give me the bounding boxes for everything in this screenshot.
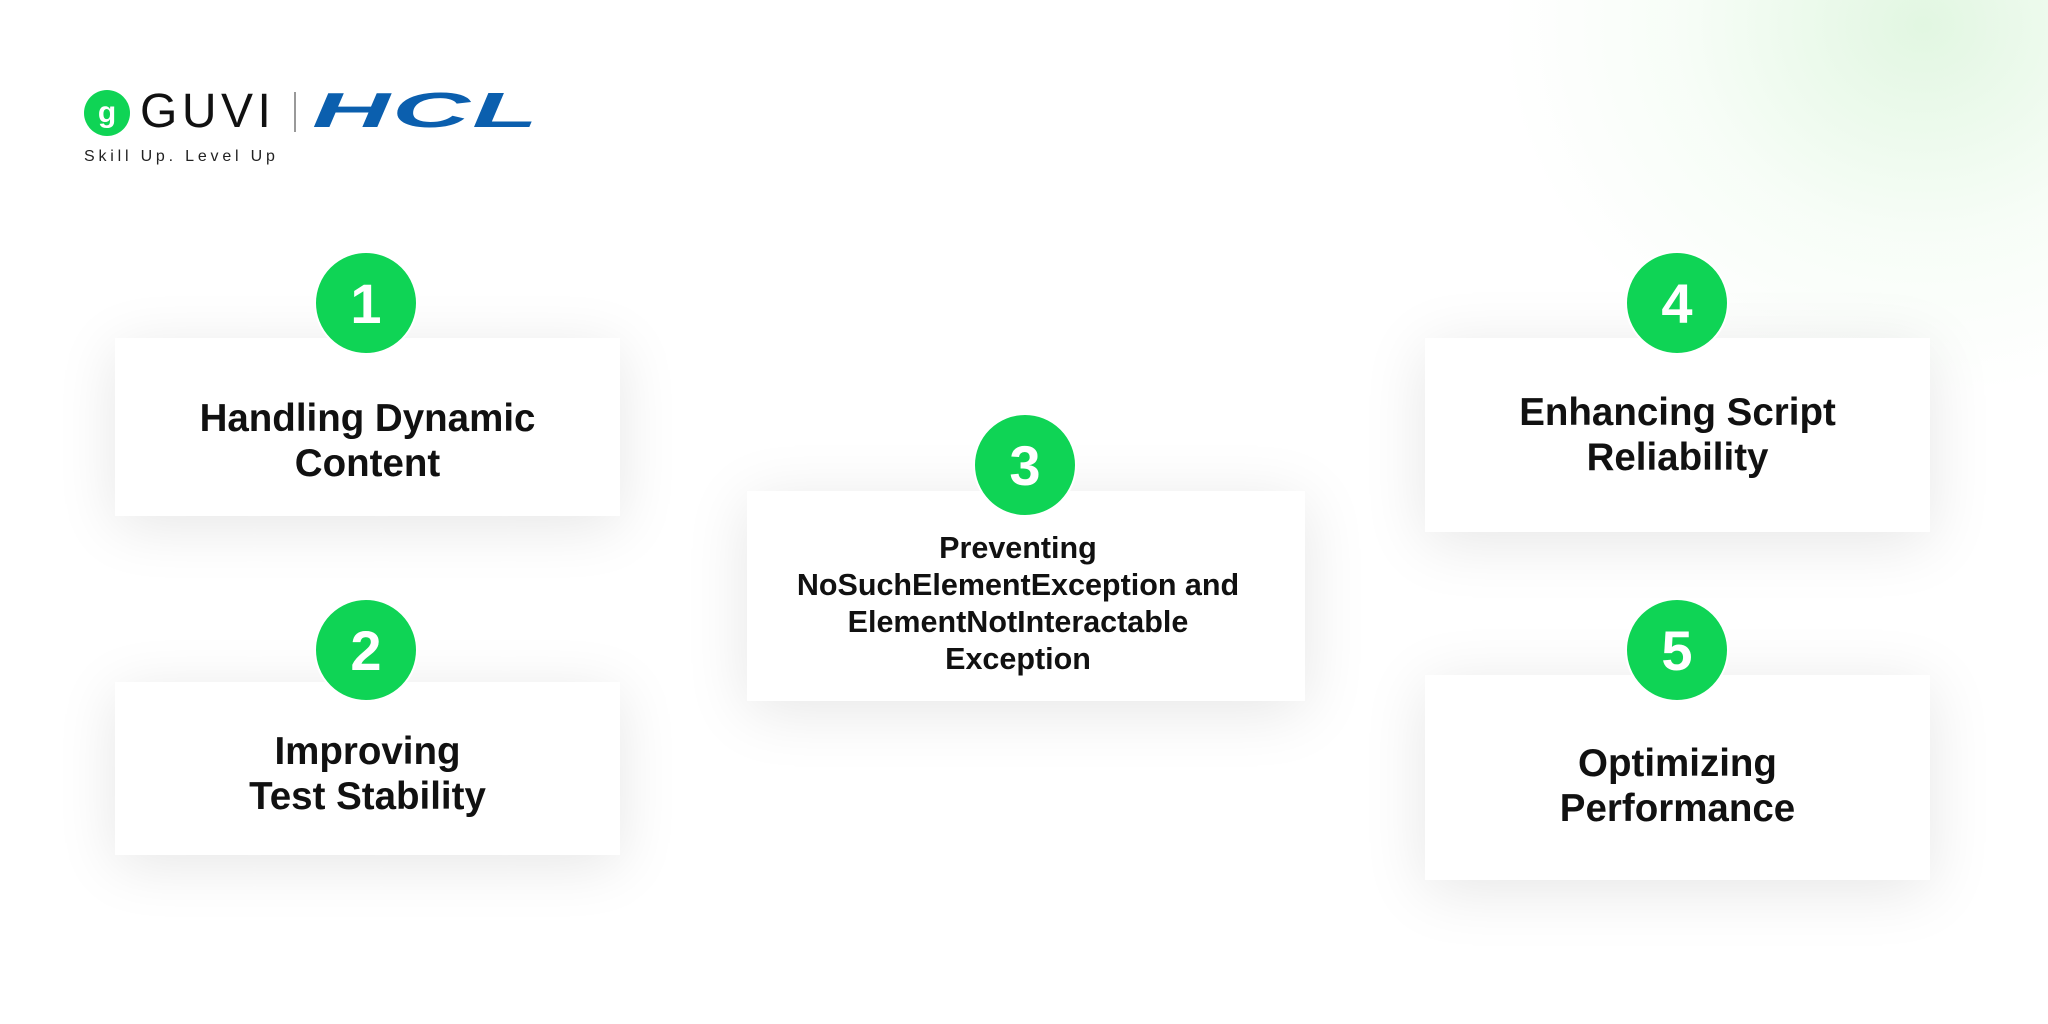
logo xyxy=(84,84,540,165)
badge 4: 4 xyxy=(1661,272,1693,334)
card 3: NoSuchElementException and xyxy=(797,568,1239,602)
card 4 xyxy=(1425,338,1930,532)
card 2: Improving xyxy=(274,730,461,772)
badge 4 xyxy=(1625,251,1729,355)
badge 5: 5 xyxy=(1661,618,1693,682)
badge 1 xyxy=(314,251,418,355)
hcl wordmark: HCL xyxy=(312,84,540,138)
icon: guvi xyxy=(84,90,130,136)
card 5: Optimizing xyxy=(1578,742,1777,784)
card 1: Handling Dynamic xyxy=(200,397,535,440)
card 4: Enhancing Script xyxy=(1519,391,1836,434)
badge 2: 2 xyxy=(350,618,382,682)
card 5 xyxy=(1425,675,1930,880)
badge 2 xyxy=(314,598,418,702)
card 4: Reliability xyxy=(1587,436,1768,479)
icon: guvi: g xyxy=(98,96,116,129)
card 1: Content xyxy=(295,442,440,485)
badge 3 xyxy=(973,413,1077,517)
guvi wordmark: GUVI xyxy=(140,85,275,138)
card 2: Test Stability xyxy=(249,774,486,818)
card 3 xyxy=(747,491,1305,701)
card 3: ElementNotInteractable xyxy=(848,605,1188,639)
card 3: Preventing xyxy=(939,531,1097,565)
card 5: Performance xyxy=(1560,786,1795,830)
card 1 xyxy=(115,338,620,516)
badge 5 xyxy=(1625,598,1729,702)
badge 1: 1 xyxy=(350,272,382,334)
card 2 xyxy=(115,682,620,855)
tagline: Skill Up. Level Up xyxy=(84,148,279,165)
badge 3: 3 xyxy=(1009,434,1041,496)
card 3: Exception xyxy=(945,642,1091,676)
